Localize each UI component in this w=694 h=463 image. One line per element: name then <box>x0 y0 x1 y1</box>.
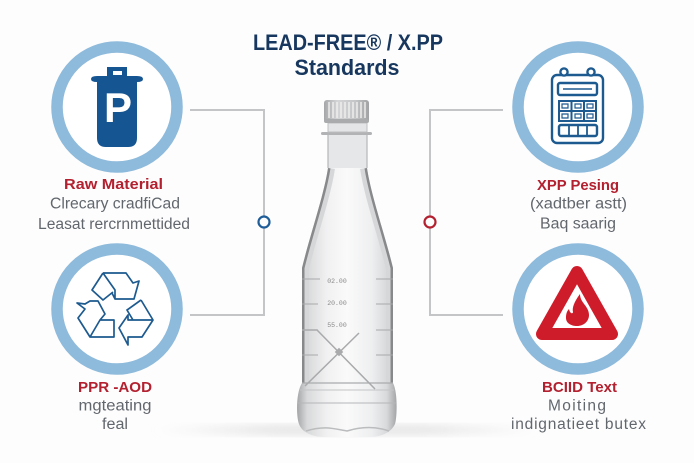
bottle cap <box>324 100 369 123</box>
icon: warning triangle with flame <box>542 272 612 334</box>
label: BCIID Text <box>542 379 617 396</box>
title: Standards <box>294 55 400 80</box>
bottle body <box>297 134 397 437</box>
connector: left <box>190 110 270 315</box>
label: Raw Material <box>64 176 163 193</box>
icon ring <box>518 249 638 369</box>
icon: calculator <box>552 68 603 143</box>
bottle measurement marks: 20.00 <box>327 300 347 307</box>
icon ring <box>57 249 177 369</box>
icon: recycle arrows <box>77 273 153 345</box>
panel: raw material: Leasat rercrnmettided <box>38 216 190 233</box>
label: PPR -AOD <box>78 379 152 396</box>
panel: bcid test: indignatieet butex <box>511 416 646 433</box>
bottle shadow <box>152 424 542 436</box>
bottle measurement marks <box>302 278 393 355</box>
connector: right <box>424 110 503 315</box>
panel: recycling <box>57 249 177 433</box>
icon ring <box>57 47 177 167</box>
icon: P container <box>91 67 143 147</box>
panel: xpp testing: Baq saarig <box>540 216 616 232</box>
title: LEAD-FREE® / X.PP <box>253 30 443 55</box>
panel: bcid test: Moiting <box>548 398 606 414</box>
bottle measurement marks: 02.00 <box>327 278 347 285</box>
icon ring <box>518 47 638 167</box>
title <box>253 30 443 80</box>
bottle measurement marks: 55.00 <box>327 322 347 329</box>
panel: bcid test <box>511 249 646 433</box>
bottle X mark <box>302 330 375 389</box>
panel: xpp testing: (xadtber astt) <box>530 196 627 212</box>
label: XPP Pesing <box>537 177 619 194</box>
bottle <box>152 100 542 437</box>
panel: raw material: Clrecary cradfiCad <box>50 196 180 212</box>
panel: raw material <box>38 47 190 233</box>
panel: recycling: mgteating <box>78 398 152 414</box>
bottle neck flange <box>321 132 372 135</box>
panel: recycling: feal <box>102 416 128 433</box>
panel: xpp testing <box>518 47 638 232</box>
icon: P container: P <box>104 84 132 131</box>
